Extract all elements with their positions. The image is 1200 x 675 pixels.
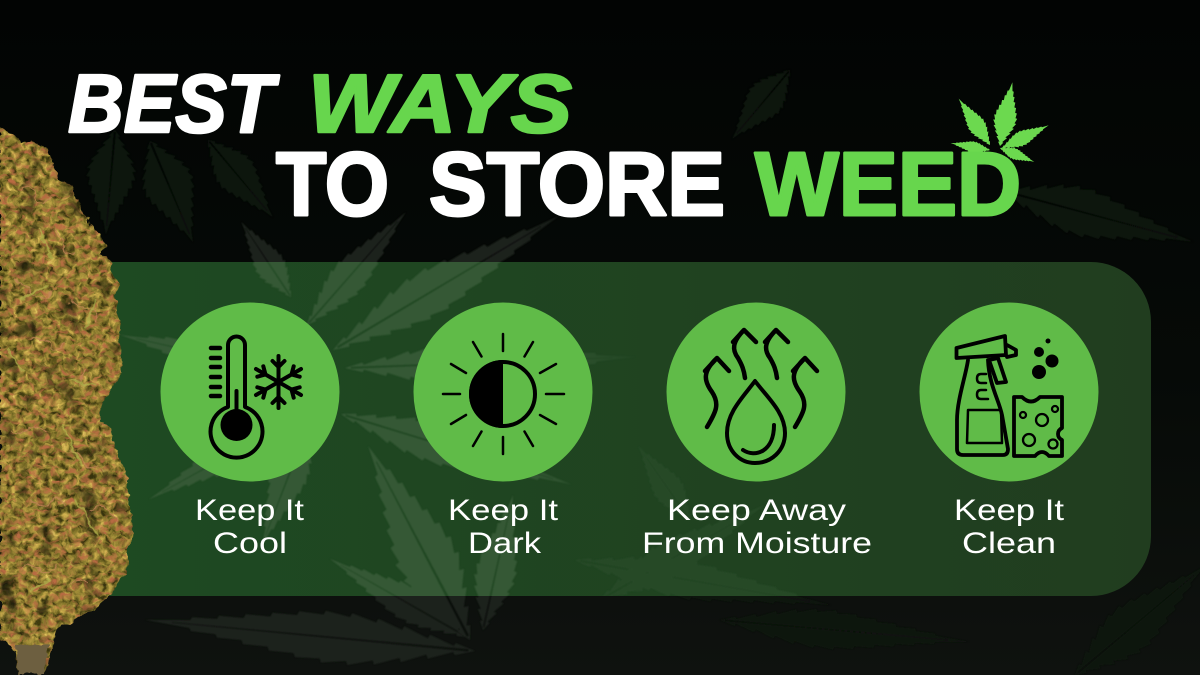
label (642, 494, 872, 560)
label: From Moisture (642, 527, 872, 560)
circle (666, 302, 846, 482)
label: Keep It (448, 494, 559, 527)
icon: half sun (443, 334, 564, 454)
label: Keep Away (667, 494, 846, 527)
label (954, 494, 1065, 560)
label: Clean (962, 527, 1056, 560)
label: Keep It (195, 494, 305, 527)
title line 1 (68, 57, 572, 150)
title line 1: WAYS (308, 57, 572, 150)
circle (414, 302, 592, 482)
item: keep it cool (160, 302, 340, 560)
title line 1: BEST (68, 57, 280, 150)
panel: storage tips (100, 262, 1151, 596)
item: keep away from moisture (642, 302, 872, 560)
title line 2 (276, 135, 1021, 235)
title line 2: STORE (429, 135, 725, 235)
item: keep it clean (920, 302, 1098, 560)
label (195, 494, 305, 560)
circle (920, 302, 1098, 482)
label (448, 494, 559, 560)
label: Cool (213, 527, 287, 560)
circle (160, 302, 340, 482)
label: Dark (468, 527, 542, 560)
icon: thermometer and snowflake (211, 336, 304, 458)
title line 2: WEED (755, 135, 1021, 235)
title (68, 57, 1052, 235)
label: Keep It (954, 494, 1065, 527)
title line 2: TO (276, 135, 389, 235)
icon: spray bottle and sponge (956, 336, 1062, 456)
icon: leaf on title (950, 80, 1052, 167)
item: keep it dark (414, 302, 592, 560)
photo: cannabis bud (0, 120, 145, 675)
icon: water drop with rising vapour (705, 330, 817, 463)
